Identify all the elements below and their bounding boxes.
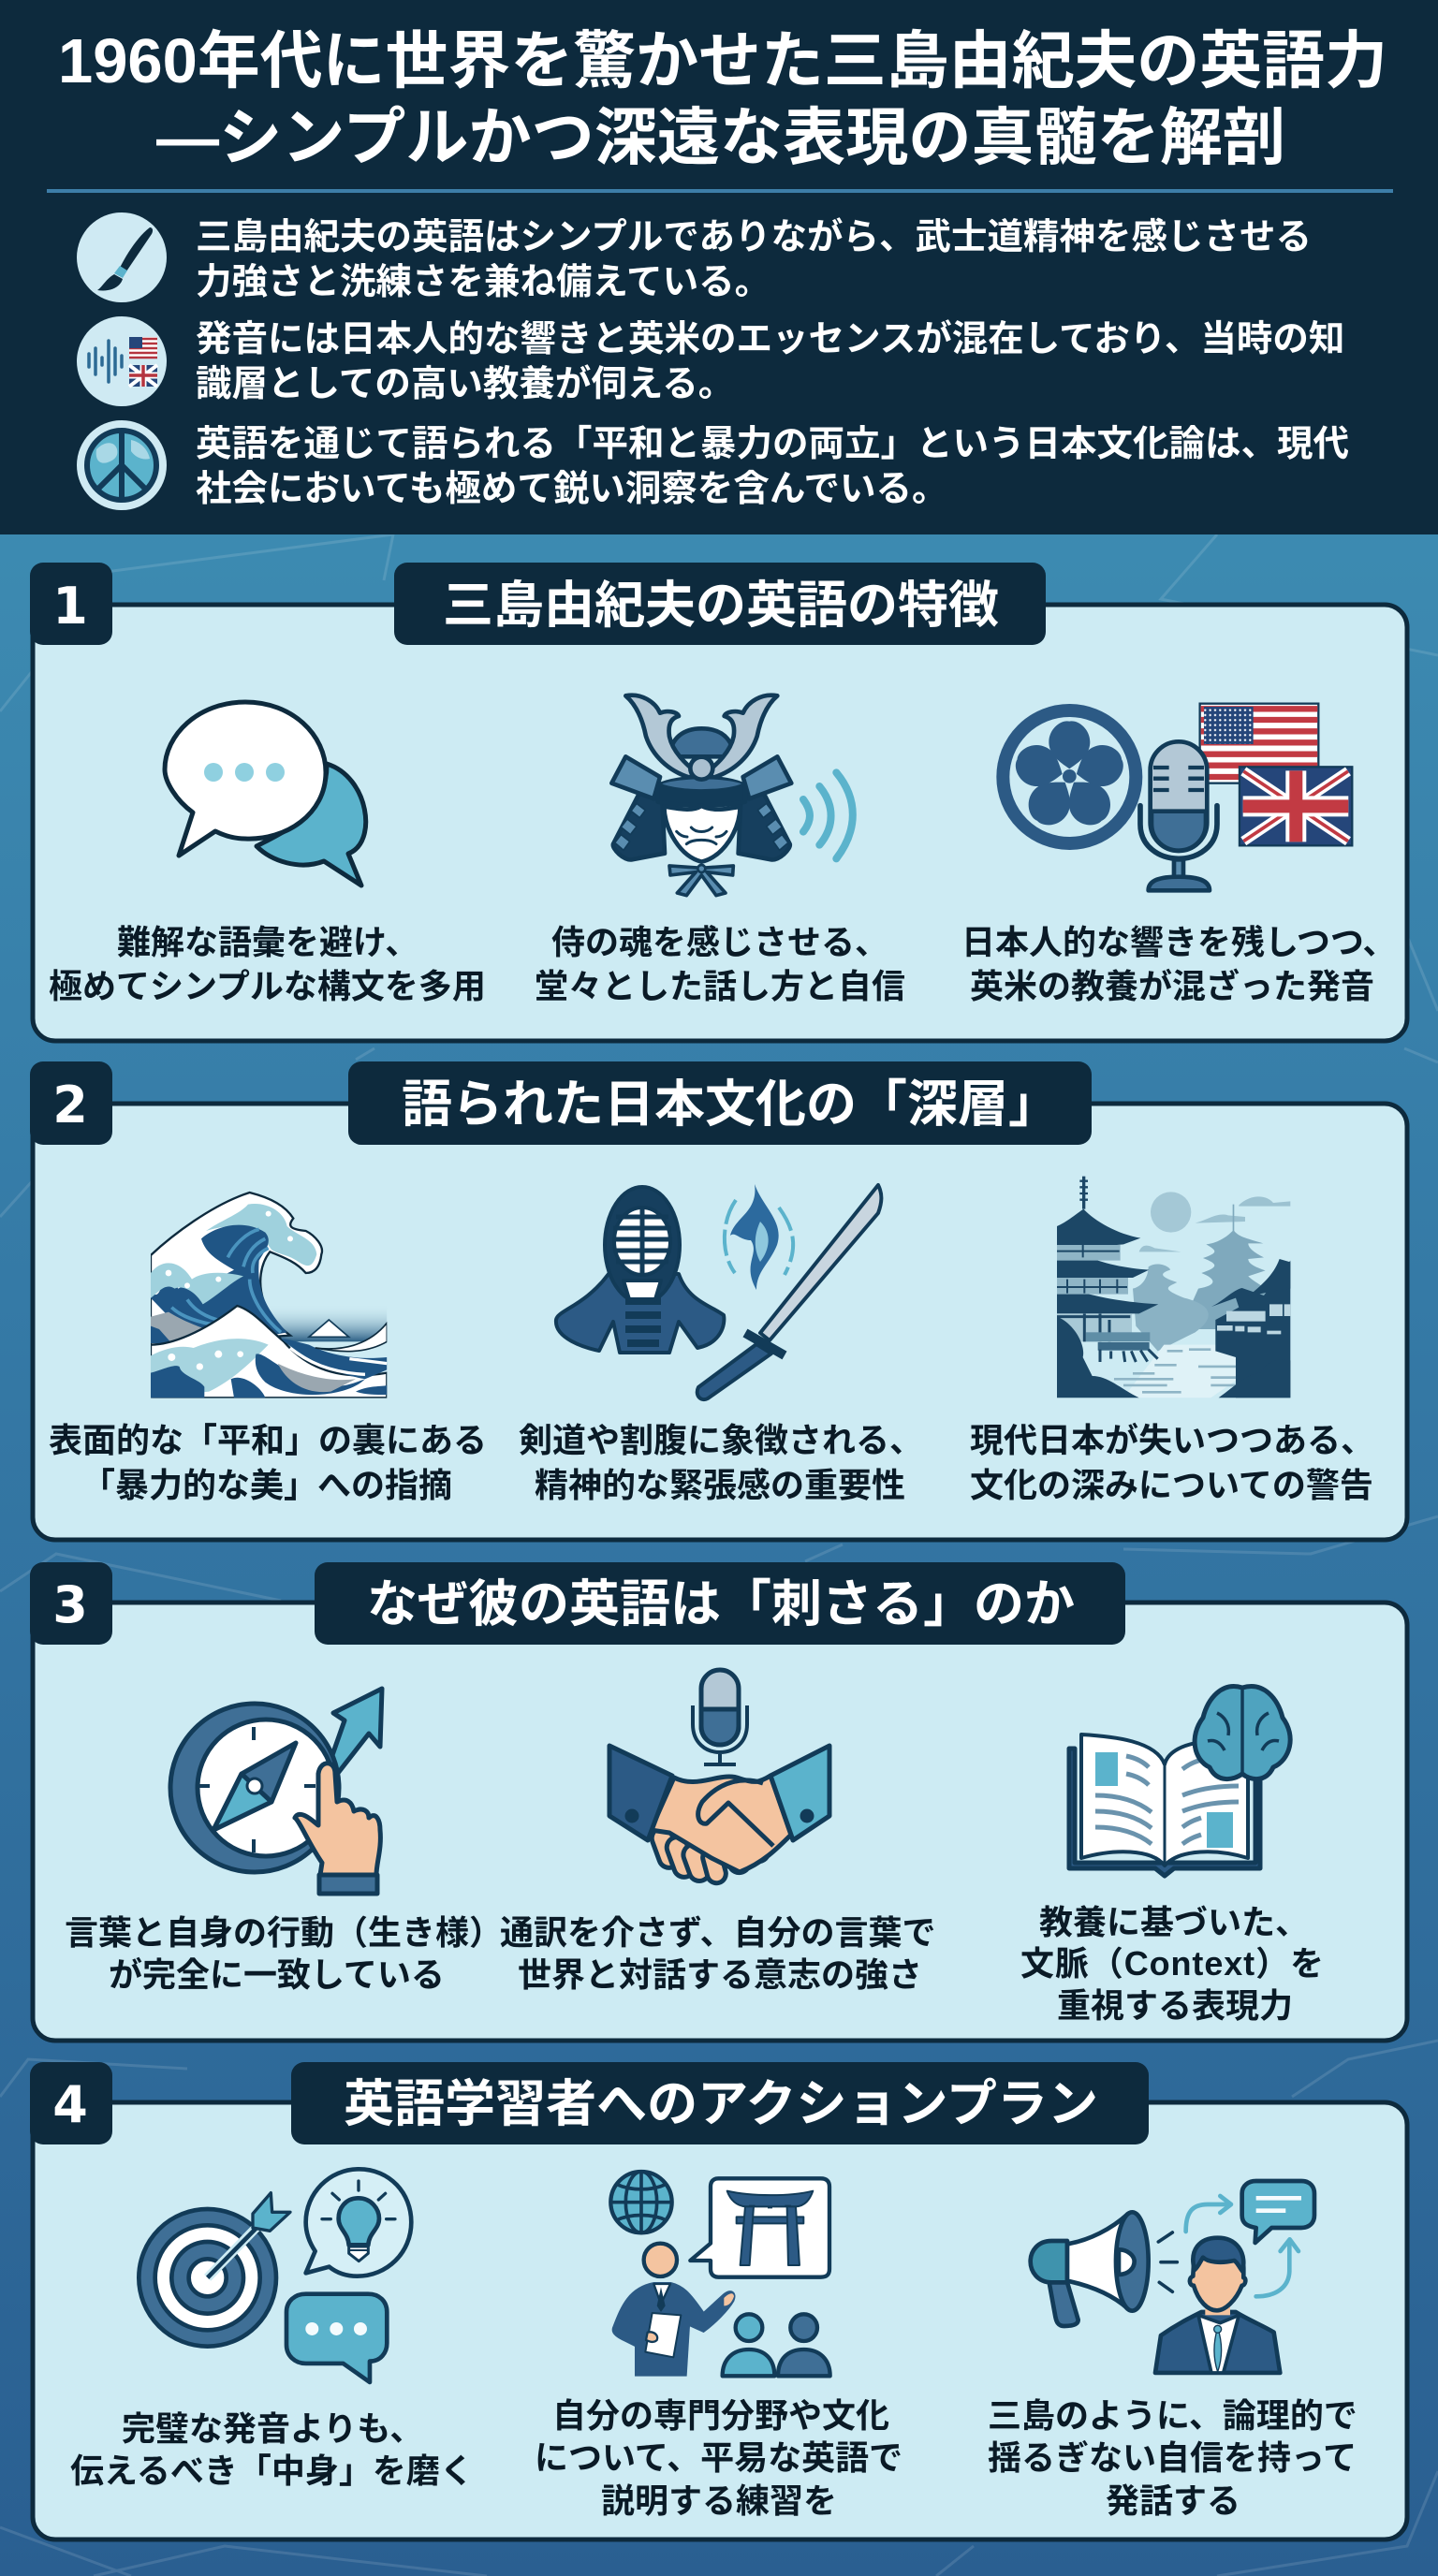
number badge 1: 1 [52, 577, 88, 636]
heading 2 [348, 1061, 1092, 1145]
bullet text 1: 力強さと洗練さを兼ね備えている。 [196, 262, 770, 302]
icon: family crest, microphone, flags [1003, 704, 1352, 890]
captions section 3: 重視する表現力 [1057, 1986, 1293, 2025]
icon: compass with arrow and pointing hand [170, 1689, 382, 1894]
title [58, 26, 1387, 173]
heading 2: 語られた日本文化の「深層」 [402, 1076, 1059, 1133]
number badge 4 [30, 2062, 112, 2144]
icon: presenter with torii speech bubble and audience [610, 2172, 830, 2376]
captions section 4: 発話する [1106, 2481, 1240, 2520]
icon: great wave [151, 1193, 387, 1398]
captions section 4: 完璧な発音よりも、 [122, 2409, 423, 2448]
icon: open book and brain [1069, 1687, 1290, 1876]
captions section 1: 難解な語彙を避け、 [117, 923, 418, 961]
panel: section 3 [30, 1562, 1407, 2041]
captions section 4: について、平易な英語で [535, 2438, 902, 2477]
bullet text 1: 三島由紀夫の英語はシンプルでありながら、武士道精神を感じさせる [196, 217, 1312, 257]
bullet text 3 [196, 424, 1349, 509]
icon: pagoda landscape [1057, 1177, 1290, 1398]
heading 4: 英語学習者へのアクションプラン [344, 2076, 1098, 2132]
icon: voice waveform and flags [77, 316, 167, 406]
bullet text 3: 英語を通じて語られる「平和と暴力の両立」という日本文化論は、現代 [196, 424, 1349, 464]
bullet text 2: 識層としての高い教養が伺える。 [196, 364, 734, 404]
heading 4 [291, 2062, 1149, 2144]
captions section 1: 侍の魂を感じさせる、 [551, 923, 888, 961]
header panel [0, 0, 1438, 534]
captions section 4 [70, 2396, 1357, 2520]
captions section 1: 極めてシンプルな構文を多用 [49, 967, 486, 1005]
number badge 2 [30, 1061, 112, 1145]
captions section 2: 精神的な緊張感の重要性 [535, 1466, 905, 1504]
captions section 3: が完全に一致している [109, 1955, 445, 1994]
number badge 2: 2 [52, 1076, 88, 1134]
panel: section 1 [30, 563, 1407, 1041]
icon: peace globe [77, 420, 167, 510]
captions section 2: 「暴力的な美」への指摘 [81, 1466, 452, 1504]
bullet text 2 [196, 319, 1344, 404]
icon: paint brush [77, 212, 167, 302]
captions section 4: 三島のように、論理的で [988, 2396, 1357, 2435]
panel: section 2 [30, 1061, 1407, 1540]
captions section 1: 日本人的な響きを残しつつ、 [961, 923, 1396, 961]
icon: speech bubbles [165, 702, 366, 886]
captions section 3 [65, 1903, 1324, 2025]
heading 3: なぜ彼の英語は「刺さる」のか [367, 1576, 1075, 1632]
bullet text 2: 発音には日本人的な響きと英米のエッセンスが混在しており、当時の知 [196, 319, 1344, 359]
bullet text 1 [196, 217, 1312, 302]
bullet text 3: 社会においても極めて鋭い洞察を含んでいる。 [196, 469, 947, 509]
captions section 3: 通訳を介さず、自分の言葉で [500, 1913, 935, 1952]
title: 1960年代に世界を驚かせた三島由紀夫の英語力 [58, 26, 1387, 96]
captions section 3: 言葉と自身の行動（生き様） [65, 1913, 503, 1952]
captions section 3: 文脈（Context）を [1020, 1944, 1324, 1983]
captions section 2: 現代日本が失いつつある、 [970, 1421, 1374, 1459]
icon: samurai helmet with sound waves [611, 695, 853, 896]
icon: kendo mask and katana [556, 1184, 881, 1399]
captions section 1: 堂々とした話し方と自信 [535, 967, 905, 1005]
captions section 2: 剣道や割腹に象徴される、 [519, 1421, 923, 1459]
title: —シンプルかつ深遠な表現の真髄を解剖 [156, 103, 1285, 173]
panel: section 4 [30, 2062, 1407, 2539]
number badge 1 [30, 563, 112, 645]
captions section 4: 説明する練習を [601, 2481, 837, 2520]
number badge 4: 4 [52, 2075, 88, 2134]
captions section 4: 伝えるべき「中身」を磨く [70, 2452, 474, 2490]
captions section 2: 文化の深みについての警告 [970, 1466, 1373, 1504]
number badge 3 [30, 1562, 112, 1645]
icon: megaphone and businessman [1031, 2181, 1314, 2373]
captions section 3: 教養に基づいた、 [1039, 1903, 1309, 1941]
heading 3 [315, 1562, 1125, 1645]
captions section 2 [49, 1421, 1374, 1504]
captions section 1: 英米の教養が混ざった発音 [970, 967, 1374, 1005]
heading 1: 三島由紀夫の英語の特徴 [443, 578, 999, 634]
captions section 4: 揺るぎない自信を持って [988, 2438, 1357, 2477]
number badge 3: 3 [52, 1575, 88, 1634]
captions section 3: 世界と対話する意志の強さ [518, 1955, 922, 1994]
heading 1 [394, 563, 1046, 645]
captions section 4: 自分の専門分野や文化 [552, 2396, 889, 2435]
icon: handshake with microphone [609, 1670, 829, 1885]
captions section 1 [49, 923, 1396, 1005]
icon: target, light bulb, chat bubble [139, 2169, 411, 2382]
captions section 2: 表面的な「平和」の裏にある [49, 1421, 487, 1459]
